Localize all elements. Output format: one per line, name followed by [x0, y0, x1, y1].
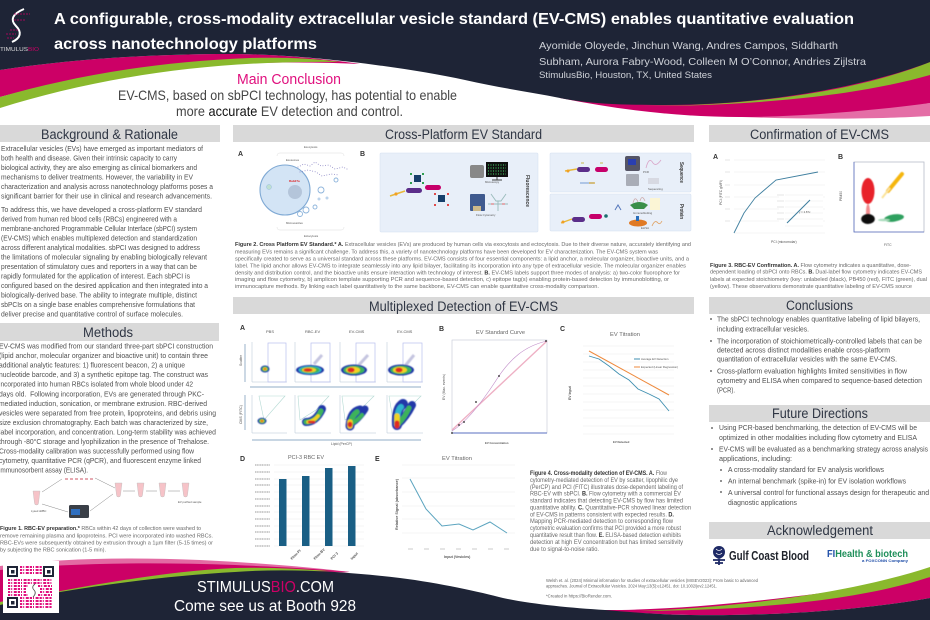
- figure 1 caption: [0, 526, 213, 554]
- figure 3A: dose-dependent loading chart: y = 2.87x: [799, 210, 811, 214]
- text: methods: cytometry, quantitative PCR (qPCR), and fluorescent enzyme linked: [0, 456, 201, 465]
- QR code: [3, 561, 59, 613]
- figure 4 caption: Mapping PCR-mediated detection to corresponding flow: [530, 518, 673, 525]
- figure 2B: protein panel: Protein: [678, 204, 684, 219]
- figure 2A: extracellular vesicle biogenesis: Rab27a: [289, 179, 300, 183]
- list: conclusions: including extracellular vesicles.: [717, 324, 809, 334]
- figure 2B: protein panel: Immunoblotting: [633, 211, 653, 215]
- figure 4E: EV titration ELISA line chart: Relative Signal (absorbance): [394, 478, 399, 530]
- title: A configurable, cross-modality extracellular vesicle standard (EV-CMS) enables quantitative evaluation: [54, 11, 854, 28]
- figure 4D: PCI-3 RBC EV bar chart: Input: [350, 551, 359, 561]
- figure 2B: sequence panel: Sequence: [678, 162, 684, 183]
- figure 2A: extracellular vesicle biogenesis: Microvesicles: [286, 221, 303, 225]
- figure 4 caption: Figure 4. Cross-modality detection of EV-CMS. A. Flow: [530, 470, 667, 477]
- logo: StimulusBio: TIMULUS BIO: [0, 47, 40, 53]
- figure 2B: sequence panel: PCR: [643, 170, 649, 174]
- list: future directions: An internal benchmark (spike-in) for EV isolation workflows: [728, 476, 906, 486]
- figure 2B: fluorescence panel: Microscopy: [485, 180, 500, 184]
- figure 4 caption: standard indicates that detecting EV-CMS by flow has limited: [530, 498, 683, 504]
- figure 2 caption: label. The lipid anchor allows EV-CMS to integrate seamlessly into any lipid bilayer, facilitating its incorporation into any type of extracellular vesicle. The molecular organizer enables: [235, 263, 686, 269]
- list: future directions: [711, 423, 929, 507]
- text: background: [1, 144, 214, 318]
- text: methods: size exclusion chromatography. Each batch was characterized by size,: [0, 418, 208, 427]
- figure 4 caption: RBC-EV with sbPCI. B. Flow cytometry with a commercial EV: [530, 490, 682, 498]
- figure 4E: EV titration ELISA line chart: EV Titration: [442, 456, 472, 462]
- figure 4B: EV standard curve: EV (Max. events): [442, 374, 446, 400]
- figure 2B: sequence panel: [550, 153, 691, 192]
- figure 4B: EV standard curve: B: [439, 326, 444, 333]
- figure 4C: EV titration line chart: EV Input: [568, 385, 572, 400]
- figure 2B: protein panel: ELISA: [641, 226, 649, 230]
- figure 4A: flow cytometry density plots: EV-CMS: [397, 329, 413, 334]
- figure 4A: flow cytometry density plots: CMS (FITC): [239, 405, 243, 424]
- text: methods: additional analytic features: 1) fluorescent beacon, 2) a unique: [0, 361, 185, 370]
- list: future directions: A cross-modality standard for EV analysis workflows: [728, 465, 884, 474]
- figure 2A: extracellular vesicle biogenesis: Ectocytosis: [304, 234, 319, 238]
- heading: acknowledgement: [709, 522, 930, 539]
- figure 3A: dose-dependent loading chart: A: [713, 154, 718, 161]
- text: methods: label incorporation, and concentration. Long-term stability was achieved: [0, 428, 216, 436]
- text: background: the limitations of molecular signaling by enabling biologically relevant: [1, 252, 207, 262]
- figure 4C: EV titration line chart: [560, 326, 678, 444]
- heading: methods: Methods: [83, 325, 133, 341]
- authors: [539, 40, 866, 80]
- text: background: To address this, we have developed a cross-platform EV standard: [1, 205, 202, 214]
- text: background: rapidly formulated for the application of interest. Each sbPCI is: [1, 272, 190, 280]
- figure 3 caption: (yellow). These observations demonstrate quantitative labeling of EV-CMS source: [710, 284, 912, 290]
- text: methods: (lipid anchor, molecular organizer and bioactive unit) to contain three: [0, 351, 208, 360]
- text: methods: through -80°C storage and lyophilization in the presence of Trehalose.: [0, 437, 209, 446]
- figure 2 caption: [235, 242, 691, 290]
- text: methods: nucleotide barcode, and 3) a synthetic epitope tag. The construct was: [0, 370, 208, 379]
- figure 3B: dual-label flow scatter: FITC: [884, 243, 892, 247]
- heading: future directions: [709, 405, 930, 422]
- figure 3 caption: [710, 263, 927, 290]
- figure 4 caption: cytometry-mediated detection of EV by scatter, lipophilic dye: [530, 477, 678, 484]
- figure 1: EV preparation diagram: [31, 478, 202, 518]
- figure 2A: extracellular vesicle biogenesis: [238, 145, 349, 238]
- text: methods: immunosorbent assay (ELISA).: [0, 466, 88, 475]
- figure 3B: dual-label flow scatter: PB450: [839, 191, 843, 201]
- text: background: both health and disease. Given their intrinsic capacity to carry: [1, 154, 177, 162]
- figure 1 caption: remove remaining plasma and lipoproteins. PCI were incorporated into washed RBCs.: [0, 533, 213, 539]
- text: background: deliver precise and quantitative control of surface molecules.: [1, 310, 183, 318]
- text: methods: incorporated into human RBCs isolated from whole blood under 42: [0, 380, 193, 389]
- figure 4 caption: quantitative result than flow. E. ELISA-based detection exhibits: [530, 532, 681, 539]
- list: future directions: applications, including:: [719, 454, 792, 463]
- figure 2B: fluorescence panel: B: [360, 151, 365, 158]
- figure 4D: PCI-3 RBC EV bar chart: Flow-BV: [313, 547, 326, 561]
- figure 2 caption: measuring EVs remains a significant challenge. To address this, a variety of nanotechnology platforms have been developed for EV characterization. The EV-CMS system was: [235, 249, 658, 255]
- panel: acknowledgement: [709, 522, 930, 565]
- figure 2A: extracellular vesicle biogenesis: Exocytosis: [304, 145, 318, 149]
- figure 2A: extracellular vesicle biogenesis: A: [238, 151, 243, 158]
- figure 2B: sequence panel: Sequencing: [648, 187, 663, 191]
- references: approaches. Journal of Extracellular Vesicles. 2024 May;13(5):e12451. doi: 10.1002/jev2.12451.: [546, 584, 717, 588]
- figure 4 caption: cytometric evaluation confirms that PCI provided a more robust: [530, 525, 681, 532]
- authors: Ayomide Oloyede, Jinchun Wang, Andres Campos, Siddharth: [539, 40, 838, 52]
- main conclusion: more accurate EV detection and control.: [176, 103, 403, 119]
- list: future directions: Using PCR-based benchmarking, the detection of EV-CMS will be: [719, 423, 917, 432]
- list: conclusions: Cross-platform evaluation highlights limited sensitivities in flow: [717, 366, 908, 376]
- figure 4C: EV titration line chart: EV Titration: [610, 332, 640, 338]
- figure 4A: flow cytometry density plots: EV-CMS: [349, 329, 365, 334]
- figure 4E: EV titration ELISA line chart: [375, 456, 515, 559]
- heading: future directions: Future Directions: [772, 406, 868, 422]
- panel: background and rationale: [0, 125, 220, 318]
- text: background: membrane-anchored Programmable Cellular Interface (sbPCI) system: [1, 224, 197, 233]
- text: background: Extracellular vesicles (EVs) have emerged as important mediators of: [1, 144, 204, 153]
- list: conclusions: The incorporation of stoichiometrically-controlled labels that can be: [717, 336, 922, 346]
- list: conclusions: quantitation of extracellular vesicles with the same EV-CMS.: [717, 354, 897, 364]
- main conclusion: Main Conclusion: [237, 71, 341, 88]
- text: methods: days old. Following incorporation, EVs are generated through PKC-: [0, 389, 204, 398]
- figure 4A: flow cytometry density plots: Scatter: [239, 354, 243, 366]
- main conclusion: EV-CMS, based on sbPCI technology, has potential to enable: [118, 87, 457, 103]
- panel: conclusions: [709, 297, 930, 394]
- figure 2 caption: immunocapture methods. By linking each label quantitatively to the same backbone, EV-CMS can enable quantitative cross-modality comparison.: [235, 284, 599, 290]
- figure 4D: PCI-3 RBC EV bar chart: PCI 3: [330, 552, 339, 561]
- figure 1 caption: RBC-EVs were subsequently obtained by extrusion through a 1µm filter (5-15 times) or: [0, 540, 213, 546]
- figure 4E: EV titration ELISA line chart: E: [375, 456, 380, 463]
- figure 3 caption: Figure 3. RBC-EV Confirmation. A. Flow cytometry indicates a quantitative, dose-: [710, 263, 911, 269]
- text: background: biologically-derived base. The ability to integrate multiple, distinct: [1, 290, 197, 300]
- figure 4C: EV titration line chart: Expected (Linear Regression): [641, 365, 678, 369]
- figure 2 caption: Figure 2. Cross Platform EV Standard.* A. Extracellular vesicles (EVs) are produced by human cells via exocytosis and ectocytosis. Due to their diverse nature, accurately identifying and: [235, 242, 691, 248]
- figure 4C: EV titration line chart: EV Detected: [613, 440, 630, 444]
- title: across nanotechnology platforms: [54, 36, 317, 53]
- header banner: [0, 0, 930, 119]
- figure 4 caption: of EV-CMS in patterns consistent with expected results. D.: [530, 511, 674, 518]
- figure 4C: EV titration line chart: Average EV Detection: [641, 357, 669, 361]
- text: background: across different analytical modalities. sbPCI was designed to address: [1, 243, 200, 252]
- website and booth text: [174, 579, 356, 615]
- list: conclusions: (PCR).: [717, 385, 735, 394]
- heading: methods: [0, 323, 219, 341]
- figure 4D: PCI-3 RBC EV bar chart: D: [240, 456, 245, 463]
- logo: FIHealth and biotech: FIHealth & biotech: [827, 549, 908, 560]
- heading: conclusions: Conclusions: [786, 298, 853, 314]
- figure 4B: EV standard curve: EV Standard Curve: [476, 330, 525, 336]
- logo: StimulusBio: [0, 9, 40, 53]
- logo: Gulf Coast Blood: Gulf Coast Blood: [729, 548, 809, 563]
- figure 4A: flow cytometry density plots: [239, 325, 423, 446]
- text: methods: vesicles were separated from free protein, lipoproteins, and debris using: [0, 408, 216, 417]
- figure 1: EV preparation diagram: EV purified sample: [178, 500, 202, 504]
- references: *Created in https://BioRender.com.: [546, 594, 612, 598]
- text: background: sbPCIs on a single base enables comprehensive formulations that: [1, 300, 195, 309]
- authors: Subham, Aurora Fabry-Wood, Colleen M O’Connor, Andries Zijlstra: [539, 56, 866, 68]
- website and booth text: STIMULUSBIO.COM: [197, 579, 334, 596]
- logo: Gulf Coast Blood: [713, 546, 809, 565]
- figure 4 caption: quantitative ability. C. Quantitative-PCR showed linear detection: [530, 504, 691, 512]
- figure 2 caption: specifically created to serve as a universal standard across these platforms. EV-CMS consists of four essential components: a lipid anchor, a molecular organizer, bioactive units, and a: [235, 256, 690, 262]
- figure 1 caption: by subjecting the RBC sonication (1-5 min).: [0, 548, 106, 554]
- figure 3B: dual-label flow scatter: B: [838, 154, 843, 161]
- list: conclusions: [710, 314, 922, 394]
- figure 4D: PCI-3 RBC EV bar chart: PCI-3 RBC EV: [288, 455, 324, 461]
- figure 2B: fluorescence panel: [360, 151, 538, 232]
- figure 4B: EV standard curve: EV Concentration: [485, 441, 509, 445]
- panel: multiplexed detection: [233, 297, 694, 561]
- figure 2B: fluorescence panel: Fluorescence: [524, 175, 530, 207]
- main conclusion: [118, 71, 457, 119]
- references: [546, 578, 758, 598]
- figure 4B: EV standard curve: [439, 326, 547, 445]
- figure 4A: flow cytometry density plots: A: [240, 325, 245, 332]
- text: background: significant barrier for their use in clinical and research advancements.: [1, 192, 212, 200]
- figure 4D: PCI-3 RBC EV bar chart: [240, 455, 364, 561]
- panel: methods: [0, 323, 219, 554]
- text: background: derived from human red blood cells (RBCs) engineered with a: [1, 214, 178, 224]
- figure 4A: flow cytometry density plots: PBS: [266, 329, 274, 334]
- text: methods: EV-CMS was modified from our standard three-part sbPCI construction: [0, 342, 213, 350]
- text: background: mechanisms to deliver treatments. However, the variability in EV: [1, 172, 193, 182]
- list: conclusions: detected across distinct modalities enable cross-platform: [717, 346, 890, 354]
- figure 4A: flow cytometry density plots: Lipid (PerCP): [331, 442, 352, 446]
- heading: confirmation: Confirmation of EV-CMS: [750, 127, 889, 143]
- text: methods: Cross-modality calibration was successfully performed using flow: [0, 447, 195, 456]
- panel: confirmation of EV-CMS: [709, 125, 930, 290]
- figure 4C: EV titration line chart: C: [560, 326, 565, 333]
- figure 2 caption: imaging and flow cytometry, b) amplicon template supporting PCR and sequence-based detection, c) epitope tag(s) enabling protein-based detection by immunoblotting, or: [235, 277, 669, 283]
- figure 4 caption: (PerCP) and PCI (FITC) illustrates dose-dependent labeling of: [530, 484, 683, 491]
- authors: StimulusBio, Houston, TX, United States: [539, 70, 713, 80]
- references: Welsh et. al. (2024) Minimal information for studies of extracellular vesicles (MISEV2023): From basic to advanced: [546, 578, 758, 583]
- figure 3B: dual-label flow scatter: [838, 154, 924, 247]
- text: methods: [0, 342, 216, 475]
- figure 3 caption: dependent loading of sbPCI onto RBCs. B. Dual-label flow cytometry indicates EV-CMS: [710, 270, 922, 276]
- figure 2B: protein panel: [550, 194, 691, 231]
- heading: multiplexed detection: Multiplexed Detection of EV-CMS: [369, 299, 558, 315]
- figure 4A: flow cytometry density plots: RBC-EV: [305, 329, 320, 334]
- text: background: configured based on the desired application and then integrated into a: [1, 281, 209, 290]
- figure 3A: dose-dependent loading chart: PCI (FITC gMFI): [719, 180, 723, 205]
- figure 4 caption: detection at high EV concentration but has limited sensitivity: [530, 539, 684, 546]
- figure 1: EV preparation diagram: Lysed sRBC: [31, 509, 46, 513]
- text: methods: mediated induction, sonication, or membrane extrusion. RBC-derived: [0, 399, 207, 408]
- text: background: biological activity, they are also emerging as clinical biomarkers and: [1, 163, 197, 172]
- title: [54, 11, 854, 53]
- heading: background and rationale: Background & Rationale: [41, 127, 178, 143]
- figure 4 caption: [530, 470, 691, 553]
- text: background: presentation of stimulatory cues and reporters in a way that can be: [1, 262, 197, 271]
- logo: FIHealth and biotech: a FOXCONN Company: [862, 559, 908, 563]
- footer banner: [0, 558, 930, 620]
- heading: cross-platform: [233, 125, 694, 143]
- heading: cross-platform: Cross-Platform EV Standard: [385, 127, 542, 143]
- panel: future directions: [709, 405, 930, 507]
- figure 2A: extracellular vesicle biogenesis: Exosomes: [286, 158, 300, 162]
- figure 1 caption: Figure 1. RBC-EV preparation.* RBCs within 42 days of collection were washed to: [0, 526, 201, 532]
- figure 3A: dose-dependent loading chart: [713, 154, 825, 244]
- heading: acknowledgement: Acknowledgement: [767, 523, 873, 539]
- figure 4 caption: due to signal-to-noise ratio.: [530, 546, 599, 553]
- heading: confirmation: [709, 125, 930, 143]
- figure 2 caption: density and distribution control, and the bioactive units ensure interaction with technology of interest. B. EV-CMS labels support three modes of analysis: a) two-color fluorophore for: [235, 270, 680, 276]
- text: background: (EV-CMS) which enables multiplexed detection and standardization: [1, 234, 197, 242]
- figure 4D: PCI-3 RBC EV bar chart: Flow-PI: [290, 549, 302, 561]
- list: future directions: optimized in other modalities including flow cytometry and ELISA: [719, 433, 917, 442]
- heading: conclusions: [709, 297, 930, 314]
- heading: multiplexed detection: [233, 297, 694, 315]
- figure 3A: dose-dependent loading chart: PCI (micromolar): [771, 240, 797, 244]
- heading: background and rationale: [0, 125, 220, 143]
- list: future directions: diagnostic applications: [728, 498, 797, 507]
- figure 4E: EV titration ELISA line chart: Input (Vesicles): [444, 555, 471, 559]
- panel: cross-platform EV standard: [233, 125, 694, 290]
- text: background: characterization and analysis across nanotechnology platforms poses a: [1, 182, 214, 191]
- website and booth text: Come see us at Booth 928: [174, 598, 356, 615]
- figure 2B: fluorescence panel: Flow Cytometry: [476, 213, 496, 217]
